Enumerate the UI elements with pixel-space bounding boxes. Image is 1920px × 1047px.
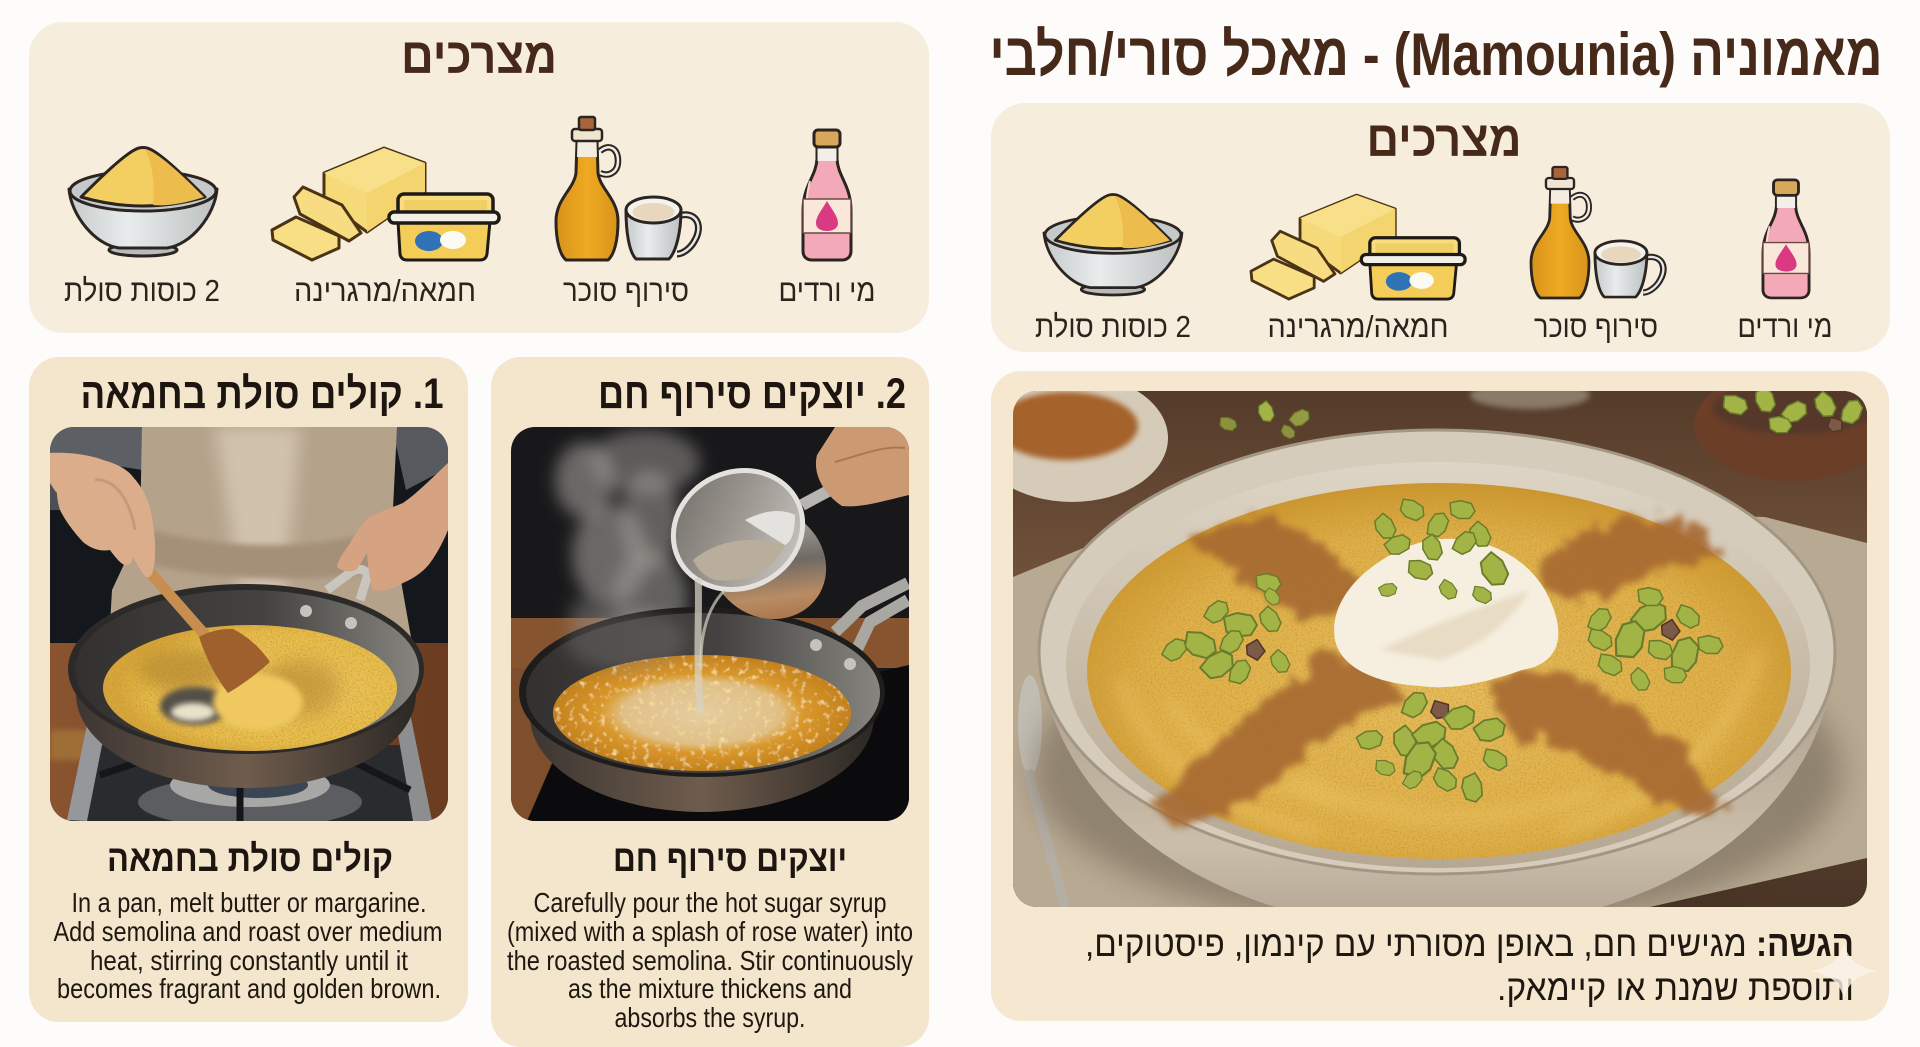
text block: step 1 instructions: heat, stirring constantly until it [90, 945, 408, 976]
label: sugar syrup: סירוף סוכר [563, 273, 689, 308]
text block: step 1 instructions: Add semolina and roast over medium [54, 916, 442, 947]
text block: step 2 instructions [507, 887, 913, 1033]
icon: butter and margarine [1251, 195, 1465, 299]
heading: ingredients left: מצרכים [401, 28, 557, 84]
text block: serving note: הגשה: מגישים חם, באופן מסורתי עם קינמון, פיסטוקים, [1085, 923, 1854, 964]
panel: step 1 [29, 357, 468, 1022]
panel: ingredients right [991, 103, 1890, 352]
heading: ingredients right: מצרכים [1366, 111, 1522, 167]
title: מאמוניה (Mamounia) - מאכל סורי/חלבי [990, 21, 1882, 88]
icon: bowl of semolina [1044, 194, 1182, 295]
label: butter or margarine: חמאה/מרגרינה [1268, 309, 1448, 344]
subheading: step 2: יוצקים סירוף חם [613, 838, 847, 879]
text block: step 2 instructions: as the mixture thickens and [568, 973, 852, 1004]
text block: step 1 instructions [54, 887, 442, 1004]
text block: serving note: ותוספת שמנת או קיימאק. [1497, 967, 1854, 1008]
label: rose water: מי ורדים [778, 273, 876, 308]
heading: step 1: 1. קולים סולת בחמאה [80, 370, 444, 418]
photo: mamounia bowl [1013, 391, 1867, 907]
heading: step 2: 2. יוצקים סירוף חם [598, 370, 906, 418]
icon: syrup bottle [556, 117, 618, 260]
text block: serving note [1085, 923, 1854, 1008]
subheading: step 1: קולים סולת בחמאה [107, 838, 393, 879]
label: semolina: 2 כוסות סולת [1035, 309, 1191, 344]
label: semolina: 2 כוסות סולת [64, 273, 220, 308]
photo: roasting semolina in a pan [50, 427, 448, 828]
pistachio cluster: top [1371, 496, 1513, 606]
photo: pouring hot syrup [511, 427, 909, 821]
icon: syrup bottle [1531, 167, 1589, 298]
pistachio cluster: right [1584, 586, 1724, 694]
text block: step 2 instructions: absorbs the syrup. [614, 1002, 806, 1033]
icon: rose water bottle [1763, 180, 1809, 298]
text block: step 2 instructions: (mixed with a splash of rose water) into [507, 916, 913, 947]
icon: cup [626, 197, 698, 259]
label: rose water: מי ורדים [1738, 309, 1832, 344]
icon: sparkle watermark [1811, 943, 1877, 999]
text block: step 1 instructions: In a pan, melt butter or margarine. [72, 887, 426, 918]
icon: bowl of semolina [69, 148, 217, 256]
pistachio cluster: bottom [1356, 688, 1511, 804]
icon: butter and margarine [272, 148, 499, 260]
icon: rose water bottle [803, 130, 851, 260]
text block: step 2 instructions: Carefully pour the hot sugar syrup [534, 887, 886, 918]
panel: ingredients left [29, 22, 929, 333]
text block: step 2 instructions: the roasted semolina. Stir continuously [507, 945, 913, 976]
label: butter or margarine: חמאה/מרגרינה [294, 273, 476, 308]
text block: step 1 instructions: becomes fragrant and golden brown. [57, 973, 441, 1004]
panel: step 2 [491, 357, 929, 1047]
pistachio cluster: left [1159, 572, 1293, 688]
label: sugar syrup: סירוף סוכר [1534, 309, 1658, 344]
panel: serving [976, 369, 1890, 1021]
icon: cup [1595, 241, 1663, 297]
